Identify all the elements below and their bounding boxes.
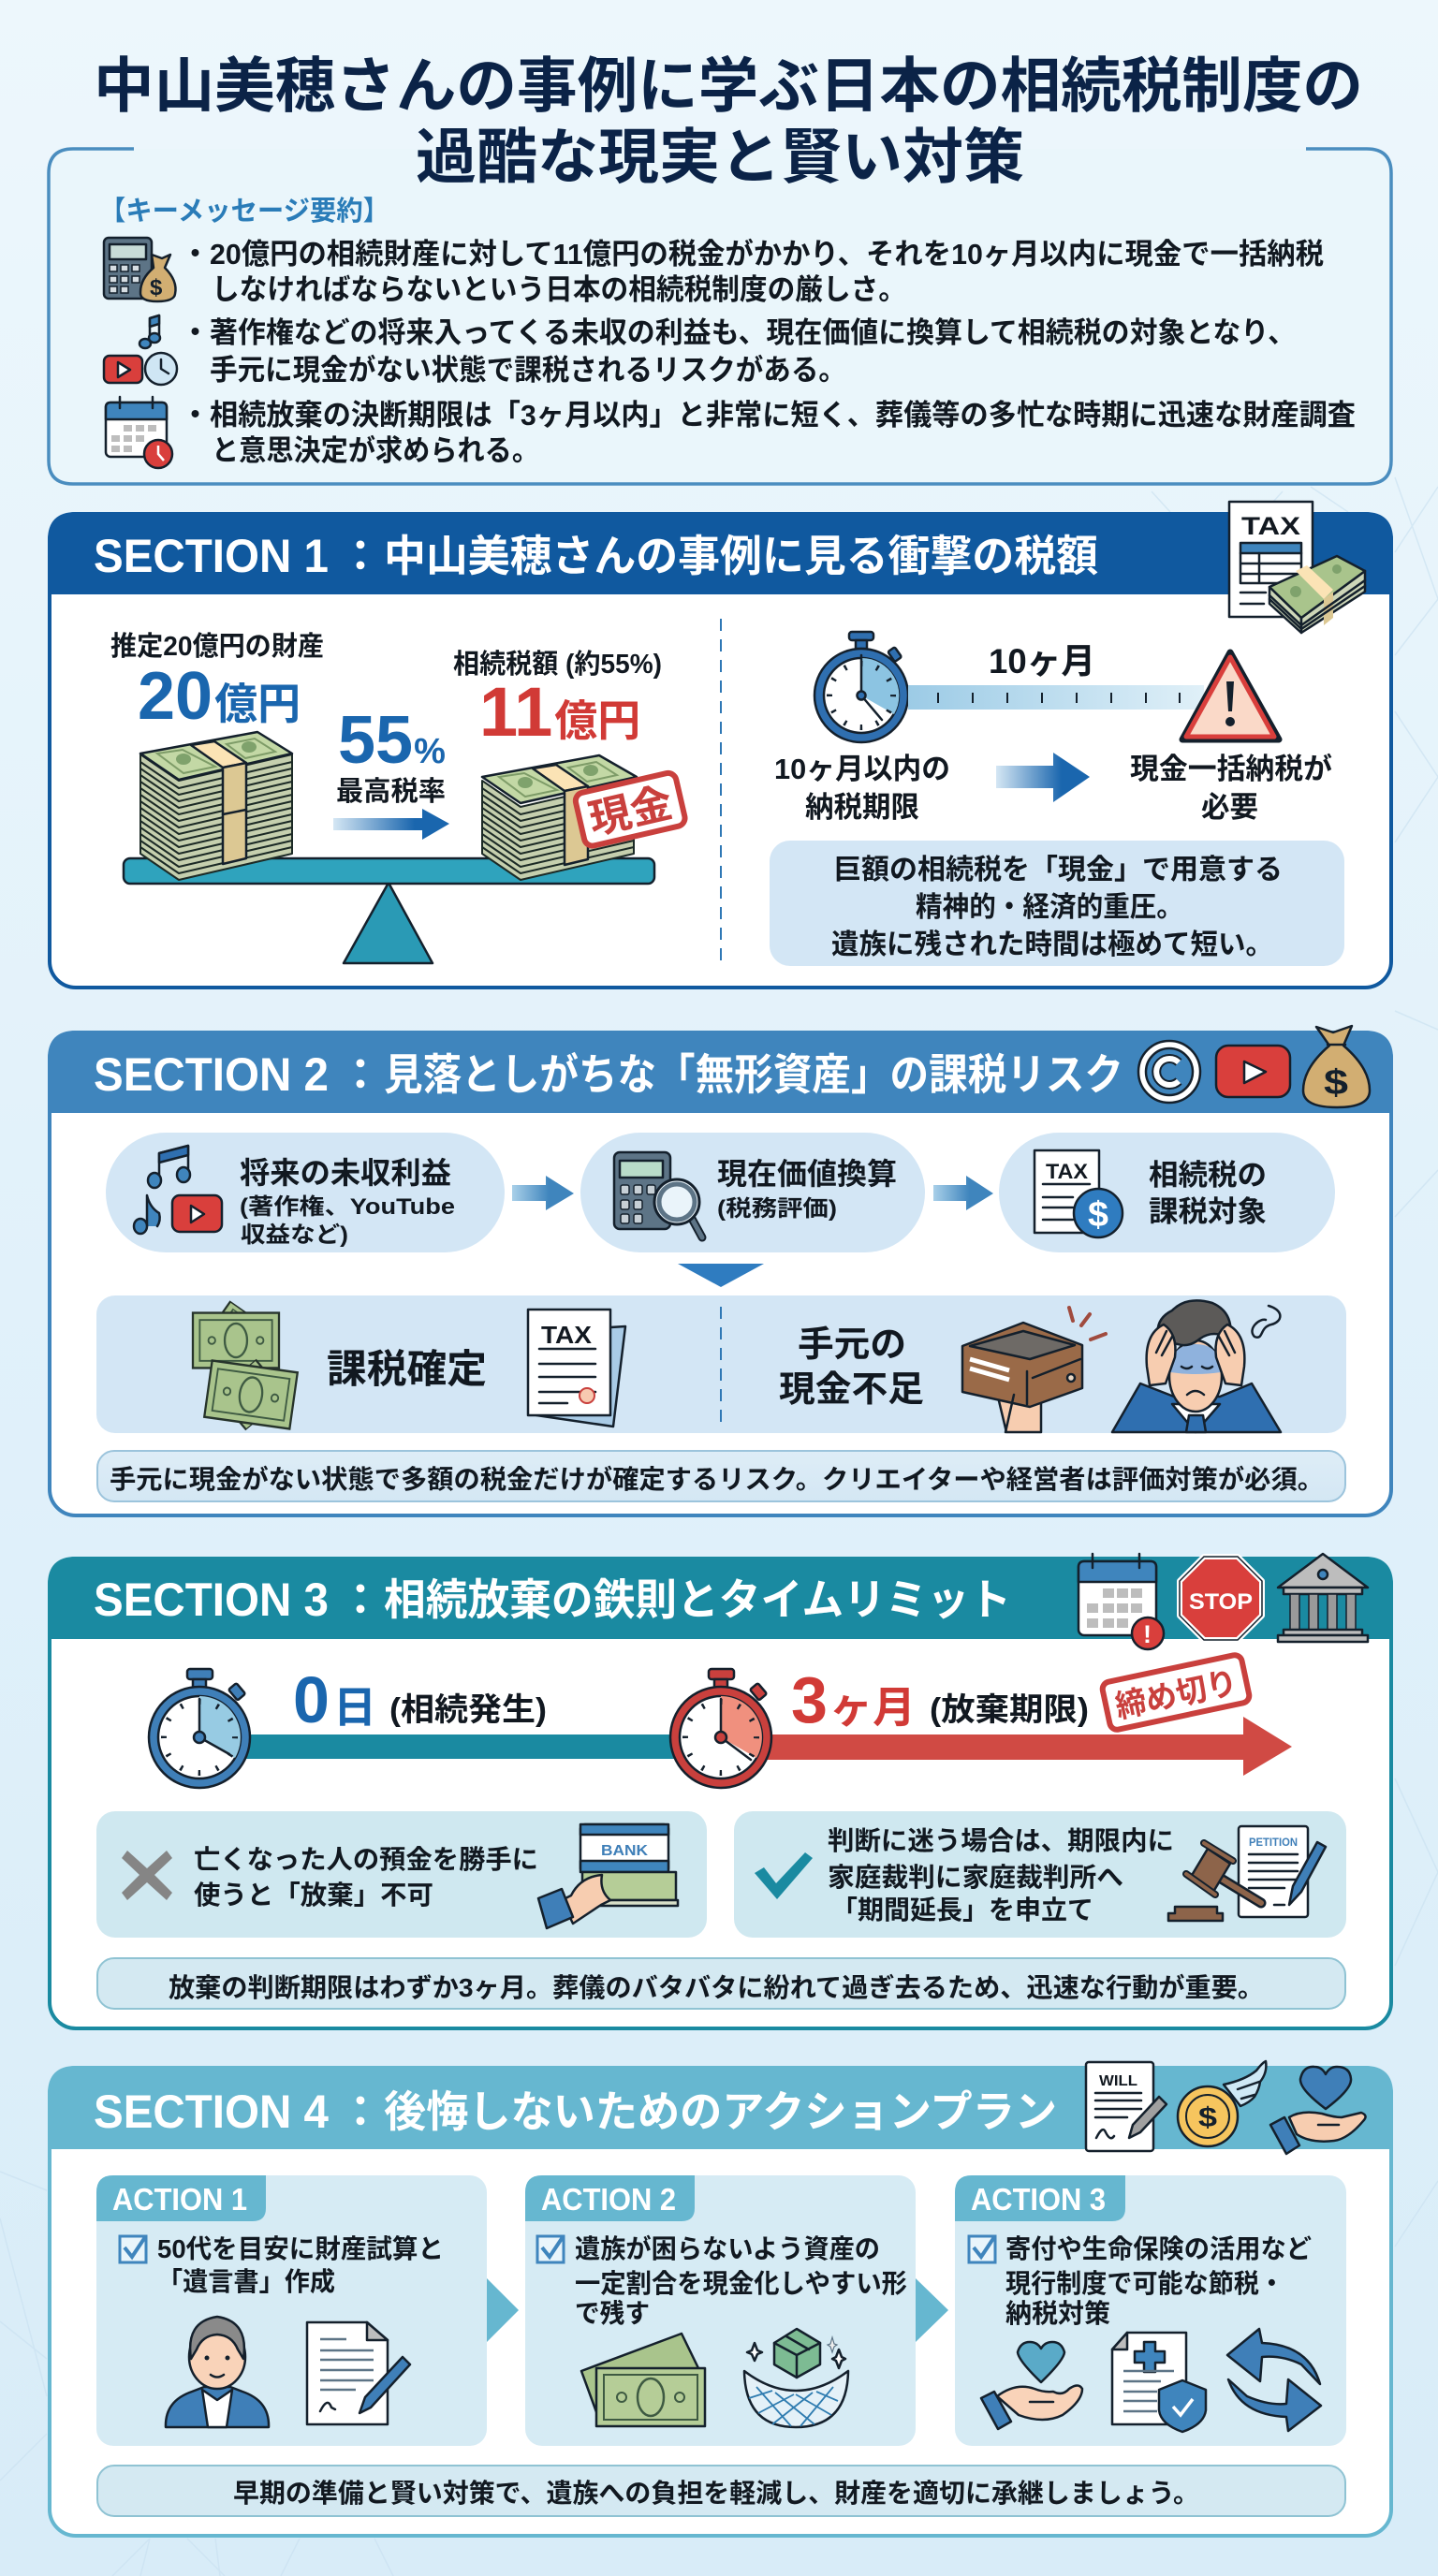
card: do not use deposits: 使うと「放棄」不可 [194, 1881, 433, 1910]
bullet text 2: 著作権などの将来入ってくる未収の利益も、現在価値に換算して相続税の対象となり、 [210, 316, 1296, 349]
title: 中山美穂さんの事例に学ぶ日本の相続税制度の [94, 52, 1363, 120]
label: day 0: 0日 [293, 1663, 376, 1736]
label: 10 months: 10ヶ月 [989, 642, 1095, 681]
card: action 3 [955, 2175, 1346, 2446]
card: action 2: 一定割合を現金化しやすい形 [575, 2269, 907, 2298]
icon: tax document: TAX [541, 1321, 593, 1349]
label: 3 months [791, 1663, 1089, 1736]
red arrow [763, 1717, 1292, 1776]
icon: bank and cash in hand [538, 1824, 678, 1928]
flow step: taxable: 相続税の [1149, 1159, 1267, 1192]
label: lump-sum cash payment [1130, 753, 1332, 824]
card: action 1: 「遺言書」作成 [157, 2267, 335, 2296]
label: day 0: (相続発生) [389, 1692, 547, 1728]
icon: will document [1086, 2062, 1167, 2151]
arrow [512, 1176, 574, 1210]
section 2 header [48, 1031, 1393, 1113]
note: closing message [97, 2466, 1345, 2516]
card: action 1 [96, 2175, 487, 2446]
label: within 10 months: 10ヶ月以内の [774, 753, 950, 785]
icon: copyright [1138, 1041, 1200, 1103]
arrow: down [678, 1264, 764, 1287]
callout: heavy burden: 遺族に残された時間は極めて短い。 [831, 929, 1273, 960]
icon: bank and cash in hand: BANK [601, 1843, 648, 1859]
stamp: cash [574, 771, 686, 847]
timeline: 3 month limit [149, 1654, 1292, 1788]
section 3 header [48, 1557, 1393, 1639]
icon: stop sign: STOP [1189, 1589, 1253, 1615]
icon: stop sign [1180, 1557, 1262, 1640]
section 4 heading: 後悔しないためのアクションプラン [384, 2087, 1057, 2136]
note: act quickly [97, 1958, 1345, 2009]
icon: checkbox [120, 2236, 146, 2262]
section 3 heading [94, 1573, 1011, 1626]
icon: calendar and clock [106, 397, 172, 468]
section 2 heading: 見落としがちな「無形資産」の課税リスク [384, 1050, 1123, 1099]
balance beam [124, 858, 654, 884]
panel: section 3 [48, 1554, 1393, 2028]
title: 過酷な現実と賢い対策 [416, 124, 1024, 191]
icon: empty wallet [962, 1308, 1106, 1432]
icon: tax document and coin: TAX [1046, 1160, 1088, 1183]
card: action 3: 寄付や生命保険の活用など [1005, 2234, 1312, 2263]
icon: calculator and magnifier [614, 1152, 702, 1237]
icon: calendar alert [1078, 1554, 1164, 1649]
card: action 3: 現行制度で可能な節税・ [1005, 2269, 1284, 2298]
icon: tax document and coin [1034, 1150, 1123, 1237]
icon: music and video [134, 1146, 222, 1234]
flow step: present value: (税務評価) [717, 1196, 837, 1222]
icon: insurance document and shield [1112, 2333, 1206, 2432]
section 1 header [48, 512, 1393, 594]
arrow [933, 1176, 993, 1210]
flow step: taxable [999, 1133, 1335, 1252]
bullet text 2 [181, 316, 1296, 387]
label: cash shortage: 手元の [798, 1325, 906, 1365]
bullet text 3: と意思決定が求められる。 [212, 434, 539, 467]
panel: section 1 [48, 502, 1393, 988]
icon: check mark [755, 1852, 813, 1899]
card: action 2: 遺族が困らないよう資産の [575, 2233, 880, 2263]
icon: money bag [1303, 1026, 1370, 1107]
icon: calculator and money bag [104, 238, 176, 301]
bullet text 2: ・ [181, 316, 210, 349]
label: cash shortage [779, 1325, 924, 1410]
icon: calendar alert: ! [1143, 1620, 1152, 1648]
result panel [96, 1295, 1346, 1433]
callout: heavy burden: 巨額の相続税を「現金」で用意する [833, 855, 1283, 886]
card: action 2 [525, 2175, 916, 2446]
money stack: 2 billion [140, 732, 292, 880]
icon: banknotes [193, 1302, 298, 1429]
card: action 3: ACTION 3 [971, 2182, 1106, 2217]
stopwatch: start [149, 1669, 250, 1788]
label: day 0 [293, 1663, 547, 1736]
card: action 2: で残す [575, 2299, 650, 2328]
section 1 heading: 中山美穂さんの事例に見る衝撃の税額 [384, 532, 1098, 580]
arrow [333, 809, 449, 840]
teal bar [245, 1734, 695, 1759]
section 3 heading: 相続放棄の鉄則とタイムリミット [384, 1575, 1011, 1624]
figure: 55 percent: 55% [338, 703, 446, 778]
section 4 heading: ： [339, 2087, 382, 2136]
panel: section 4 [48, 2061, 1393, 2536]
balance fulcrum [344, 883, 433, 963]
bullet text 1 [181, 238, 1324, 306]
chevron [916, 2278, 948, 2342]
note: risk summary [97, 1451, 1345, 1501]
chart: balance of assets and tax [124, 732, 686, 963]
section 1 heading: SECTION 1 [94, 530, 329, 582]
section 2 heading: SECTION 2 [94, 1048, 329, 1101]
card: do not use deposits: 亡くなった人の預金を勝手に [194, 1845, 538, 1874]
icon: money bag: $ [1324, 1063, 1348, 1103]
icon: courthouse [1278, 1554, 1368, 1642]
section 4 heading [94, 2086, 1057, 2138]
section 3 heading: SECTION 3 [94, 1573, 329, 1626]
card: action 3: 納税対策 [1005, 2299, 1110, 2328]
label: taxation confirmed: 課税確定 [327, 1347, 487, 1391]
flow step: present value [580, 1133, 925, 1252]
bullet text 3: ・ [181, 399, 210, 432]
icon: tax document [528, 1310, 625, 1427]
note: closing message: 早期の準備と賢い対策で、遺族への負担を軽減し、財産を適切に承継しましょう。 [233, 2479, 1199, 2508]
icon: stopwatch [814, 632, 908, 742]
card: request extension: 判断に迷う場合は、期限内に [828, 1826, 1174, 1855]
stamp: deadline: 締め切り [1112, 1665, 1240, 1725]
card: action 1: 50代を目安に財産試算と [157, 2234, 444, 2263]
flow step: future income: 収益など) [241, 1222, 348, 1248]
icon: heart in hand [1270, 2067, 1366, 2154]
label: lump-sum cash payment: 現金一括納税が [1130, 753, 1332, 785]
heading: key message: 【キーメッセージ要約】 [99, 196, 389, 227]
icon: gavel and petition [1168, 1826, 1326, 1921]
section 2 heading: ： [339, 1050, 382, 1099]
icon: coin with wing [1178, 2061, 1266, 2146]
bullet text 3: 相続放棄の決断期限は「3ヶ月以内」と非常に短く、葬儀等の多忙な時期に迅速な財産調査 [210, 399, 1356, 432]
label: estimated assets: 推定20億円の財産 [110, 631, 324, 662]
label: within 10 months: 納税期限 [805, 791, 919, 824]
label: 3 months: 3ヶ月 [791, 1663, 916, 1736]
section 1 heading [94, 530, 1098, 582]
card: action 2: ACTION 2 [541, 2182, 676, 2217]
icon: banknotes [581, 2334, 705, 2426]
timeline bar: 10 months [908, 685, 1204, 710]
card: request extension [734, 1811, 1346, 1938]
bullet text 1: ・ [181, 238, 210, 271]
section 4 header [48, 2066, 1393, 2149]
flow step: taxable: 課税対象 [1149, 1195, 1267, 1228]
icon: cross [122, 1851, 172, 1900]
section 3 heading: ： [339, 1575, 382, 1624]
section 2 heading [94, 1048, 1123, 1101]
flow step: future income [106, 1133, 505, 1252]
tab: action 2 [525, 2175, 695, 2221]
money stack: 1.1 billion [482, 755, 637, 880]
figure: 2 billion yen: 20億円 [138, 659, 301, 734]
icon: calculator and money bag: $ [150, 275, 163, 300]
icon: will document: WILL [1099, 2073, 1137, 2089]
icon: video play [1216, 1046, 1290, 1097]
card: request extension: 「期間延長」を申立て [831, 1895, 1093, 1925]
panel: key message summary [49, 149, 1391, 484]
bullet text 2: 手元に現金がない状態で課税されるリスクがある。 [210, 354, 846, 387]
label: cash shortage: 現金不足 [779, 1370, 924, 1410]
icon: tax document and coin: $ [1088, 1195, 1108, 1235]
divider [720, 619, 722, 964]
icon: coin with wing: $ [1198, 2102, 1217, 2133]
icon: warning triangle [1182, 652, 1279, 739]
stopwatch: deadline [670, 1669, 771, 1788]
icon: tax form and money: TAX [1241, 512, 1300, 540]
icon: circular arrows [1227, 2329, 1321, 2431]
label: lump-sum cash payment: 必要 [1201, 791, 1258, 824]
icon: gavel and petition: PETITION [1249, 1836, 1298, 1849]
flow step: present value: 現在価値換算 [717, 1157, 897, 1191]
bullet text 1: 20億円の相続財産に対して11億円の税金がかかり、それを10ヶ月以内に現金で一括納税 [210, 238, 1324, 271]
title [94, 52, 1363, 191]
figure: 1.1 billion yen: 11億円 [479, 673, 640, 751]
icon: box and safety net [744, 2329, 848, 2427]
icon: worried man [1112, 1300, 1281, 1432]
chevron [487, 2278, 519, 2342]
note: risk summary: 手元に現金がない状態で多額の税金だけが確定するリスク。クリエイターや経営者は評価対策が必須。 [110, 1464, 1324, 1494]
label: within 10 months [774, 753, 950, 824]
icon: document and pen [307, 2322, 410, 2424]
icon: music, video and clock [104, 315, 177, 385]
card: action 1: ACTION 1 [112, 2182, 247, 2217]
note: act quickly: 放棄の判断期限はわずか3ヶ月。葬儀のバタバタに紛れて過ぎ去るため、迅速な行動が重要。 [169, 1972, 1264, 2002]
tab: action 1 [96, 2175, 266, 2221]
label: 3 months: (放棄期限) [930, 1692, 1089, 1728]
arrow [996, 753, 1090, 802]
icon: checkbox [969, 2236, 995, 2262]
icon: senior man [166, 2317, 269, 2427]
bullet text 3 [181, 399, 1356, 467]
icon: checkbox [537, 2236, 564, 2262]
bullet text 1: しなければならないという日本の相続税制度の厳しさ。 [212, 273, 906, 306]
tab: action 3 [955, 2175, 1125, 2221]
card: request extension: 家庭裁判に家庭裁判所へ [828, 1863, 1123, 1892]
flow step: future income: 将来の未収利益 [240, 1156, 451, 1190]
icon: tax form and money [1229, 502, 1365, 633]
stamp: cash: 現金 [584, 780, 677, 843]
flow step: future income: (著作権、YouTube [240, 1194, 455, 1220]
label: top tax rate: 最高税率 [336, 776, 446, 807]
callout: heavy burden [770, 841, 1344, 966]
callout: heavy burden: 精神的・経済的重圧。 [916, 892, 1183, 923]
icon: heart in hand [981, 2342, 1082, 2429]
section 4 heading: SECTION 4 [94, 2086, 329, 2138]
card: do not use deposits [96, 1811, 707, 1938]
label: tax amount: 相続税額 (約55%) [453, 649, 662, 680]
section 1 heading: ： [339, 532, 382, 580]
panel: section 2 [48, 1026, 1393, 1515]
